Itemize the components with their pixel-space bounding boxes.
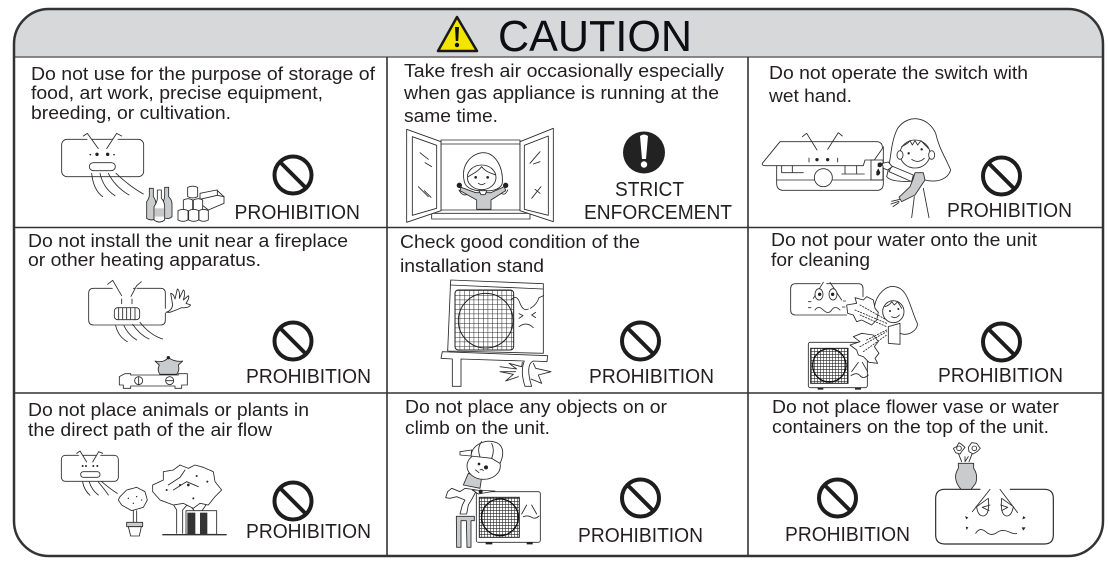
title: [438, 12, 692, 61]
text block: [771, 229, 1037, 270]
icon: prohibition sign: [274, 156, 312, 194]
text block: breeding, or cultivation.: [31, 102, 231, 123]
text block: [400, 231, 640, 276]
text block: Do not pour water onto the unit: [771, 229, 1037, 250]
label: PROHIBITION: [246, 521, 371, 543]
label: ENFORCEMENT: [584, 202, 732, 224]
text block: or other heating apparatus.: [28, 249, 261, 270]
icon: prohibition sign: [622, 322, 659, 360]
icon: warning triangle: [438, 17, 477, 51]
text block: [31, 63, 376, 123]
panel: fresh air: [403, 60, 732, 224]
icon: girl at open window: [407, 128, 553, 222]
panel: installation stand: [400, 231, 714, 388]
icon: unit above stove: [89, 280, 191, 388]
icon: unit blowing on plant and trees: [61, 451, 227, 536]
icon: vase on unit: [936, 443, 1053, 544]
text block: Check good condition of the: [400, 231, 640, 252]
text block: climb on the unit.: [405, 417, 550, 438]
label: PROHIBITION: [947, 200, 1072, 222]
text block: the direct path of the air flow: [28, 419, 273, 440]
icon: girl touching switch with wet hand: [762, 119, 951, 218]
icon: prohibition sign: [983, 158, 1020, 194]
text block: Do not install the unit near a fireplace: [28, 230, 348, 251]
icon: girl spraying water on units: [791, 282, 917, 390]
text block: Do not place any objects on or: [405, 396, 667, 417]
label: PROHIBITION: [589, 366, 714, 388]
icon: prohibition sign: [274, 482, 312, 520]
text block: Take fresh air occasionally especially: [404, 60, 725, 81]
text block: wet hand.: [768, 85, 852, 106]
panel: fireplace: [28, 230, 371, 388]
icon: strict enforcement mark: [623, 132, 665, 174]
label: PROHIBITION: [234, 202, 360, 224]
text block: [403, 60, 725, 126]
text block: Do not use for the purpose of storage of: [31, 63, 376, 84]
text block: containers on the top of the unit.: [772, 416, 1049, 437]
panel: objects or climbing: [405, 396, 703, 547]
icon: outdoor unit on broken stand: [441, 280, 551, 386]
text block: for cleaning: [771, 249, 870, 270]
text block: Do not place flower vase or water: [772, 396, 1059, 417]
text block: [28, 230, 348, 270]
text block: when gas appliance is running at the: [403, 82, 719, 103]
panel: storage: [31, 63, 376, 224]
text block: installation stand: [400, 255, 544, 276]
heading: CAUTION: [498, 12, 692, 61]
text block: [772, 396, 1059, 437]
label: PROHIBITION: [785, 524, 910, 546]
icon: prohibition sign: [622, 480, 659, 516]
text block: same time.: [404, 105, 498, 126]
label: PROHIBITION: [938, 365, 1063, 387]
icon: prohibition sign: [274, 322, 312, 360]
icon: prohibition sign: [819, 480, 856, 516]
panel: flower vase: [772, 396, 1059, 546]
label: [584, 179, 732, 224]
label: PROHIBITION: [246, 366, 371, 388]
icon: boy climbing on outdoor unit: [446, 441, 540, 547]
text block: [768, 62, 1028, 106]
label: STRICT: [615, 179, 684, 201]
text block: [405, 396, 667, 438]
text block: Do not operate the switch with: [769, 62, 1028, 83]
panel: wet hand: [762, 62, 1072, 222]
icon: indoor unit blowing on bottles and cans: [62, 133, 224, 222]
text block: Do not place animals or plants in: [28, 399, 309, 420]
panel: animals or plants: [28, 399, 371, 543]
label: PROHIBITION: [578, 525, 703, 547]
text block: [28, 399, 309, 440]
header band: [14, 9, 1103, 57]
text block: food, art work, precise equipment,: [31, 82, 323, 103]
icon: prohibition sign: [983, 324, 1020, 360]
panel: pour water: [771, 229, 1063, 390]
